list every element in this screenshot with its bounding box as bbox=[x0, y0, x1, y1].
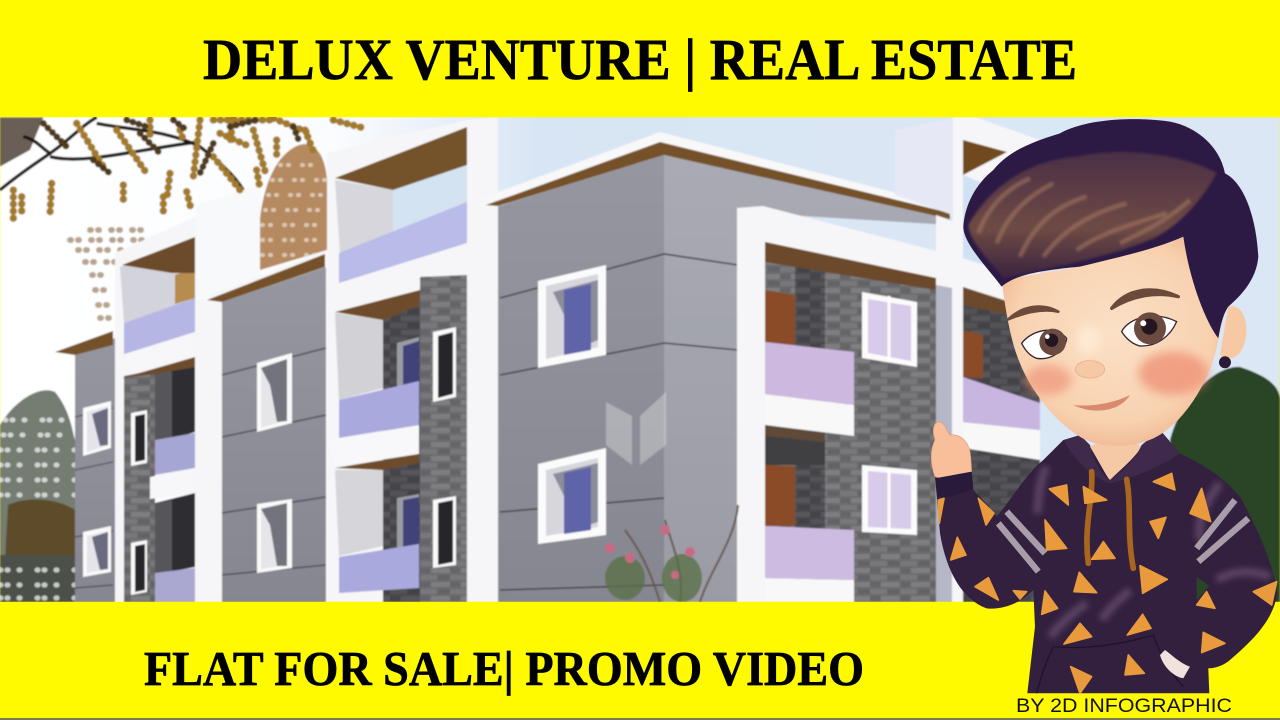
face bbox=[1002, 237, 1225, 446]
left balcony stack bbox=[115, 185, 260, 602]
overhanging branches bbox=[0, 117, 365, 223]
thumbs-up hand bbox=[931, 422, 973, 497]
earring bbox=[1219, 356, 1231, 368]
photo: apartment building bbox=[0, 117, 1280, 602]
bottom banner bbox=[0, 602, 1280, 718]
central balcony tower bbox=[327, 117, 498, 602]
left low wing bbox=[55, 331, 115, 602]
head bbox=[963, 119, 1258, 446]
cheeks bbox=[1025, 365, 1072, 395]
mid grey wall bbox=[207, 250, 326, 602]
right cheek bbox=[1138, 352, 1208, 395]
ear bbox=[1220, 306, 1246, 358]
small pale tree bbox=[70, 230, 150, 318]
nose highlight bbox=[1077, 325, 1100, 355]
bottom-left tree bbox=[0, 390, 75, 602]
cartoon boy bbox=[931, 119, 1277, 693]
subtitle: FLAT FOR SALE| PROMO VIDEO bbox=[144, 641, 864, 696]
left eyebrow bbox=[1008, 307, 1058, 319]
arm gap bbox=[1197, 577, 1209, 600]
flowering shrubs bbox=[605, 505, 738, 602]
autumn tree behind wall bbox=[259, 144, 327, 270]
mouth bbox=[1073, 395, 1130, 411]
far right wing bbox=[895, 117, 1040, 602]
left eye bbox=[1022, 330, 1067, 359]
right balcony stack bbox=[737, 206, 952, 602]
eyes bbox=[1122, 316, 1177, 346]
main grey wall bbox=[482, 132, 955, 602]
credit: BY 2D INFOGRAPHIC bbox=[1016, 696, 1232, 717]
watermark logo bbox=[606, 392, 666, 465]
right tree bbox=[1170, 367, 1280, 602]
small windows bbox=[83, 353, 292, 595]
top banner bbox=[0, 0, 1280, 117]
nose bbox=[1075, 361, 1105, 378]
title: DELUX VENTURE | REAL ESTATE bbox=[203, 27, 1077, 92]
large windows bbox=[538, 265, 606, 544]
eyebrows bbox=[1112, 290, 1178, 308]
hair highlights bbox=[968, 152, 1217, 278]
hair bbox=[963, 119, 1258, 338]
hair strands bbox=[978, 178, 1190, 257]
hoodie bbox=[935, 430, 1277, 693]
